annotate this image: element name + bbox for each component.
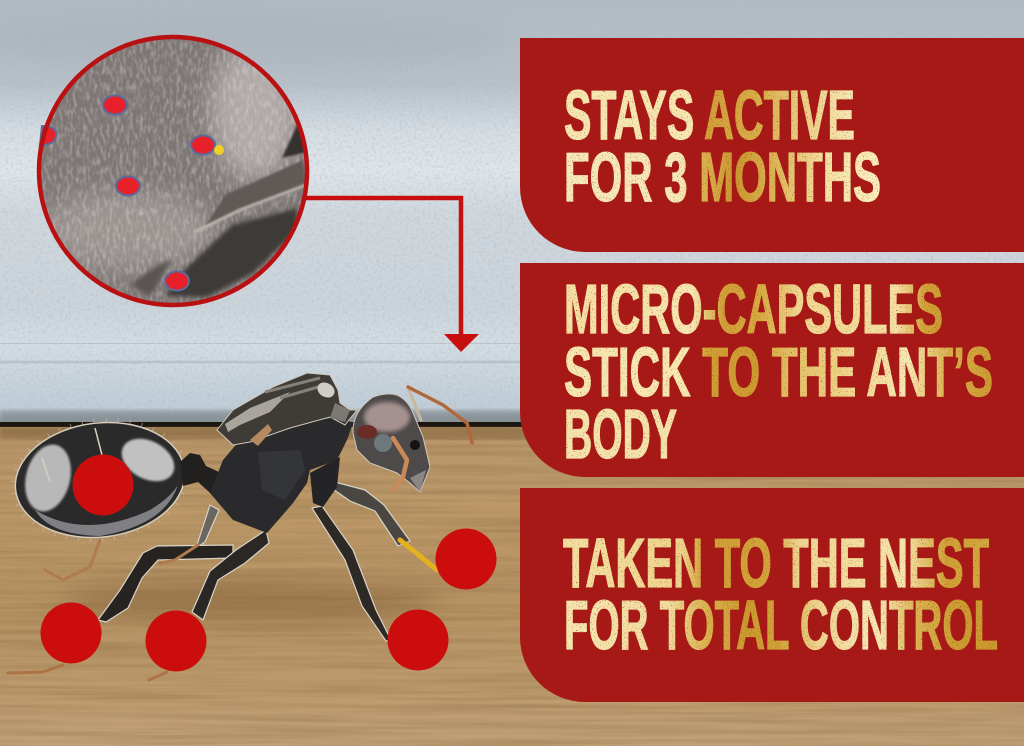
heading: stays active xyxy=(564,76,881,216)
heading: micro-capsules: BODY xyxy=(564,395,677,473)
ant legs xyxy=(98,482,410,641)
background: wall xyxy=(0,0,1024,426)
yellow capsule xyxy=(214,145,224,155)
ant antennae xyxy=(393,387,472,490)
red capsule markers on ant xyxy=(40,454,496,672)
ant thorax xyxy=(210,373,357,533)
connector arrow xyxy=(304,198,479,352)
ant abdomen xyxy=(6,411,194,549)
magnified view circle xyxy=(35,36,308,306)
ant petiole xyxy=(180,453,245,505)
heading: micro-capsules xyxy=(564,270,993,473)
background: wooden floor xyxy=(0,422,1024,746)
ant head xyxy=(353,394,430,492)
ant feet xyxy=(8,540,437,680)
panel: taken to the nest xyxy=(520,488,1024,702)
ant illustration xyxy=(6,373,472,680)
capsule dots xyxy=(40,96,215,290)
panel: micro-capsules xyxy=(520,263,1024,477)
heading: taken to the nest xyxy=(563,524,998,664)
panel: stays active xyxy=(520,38,1024,252)
